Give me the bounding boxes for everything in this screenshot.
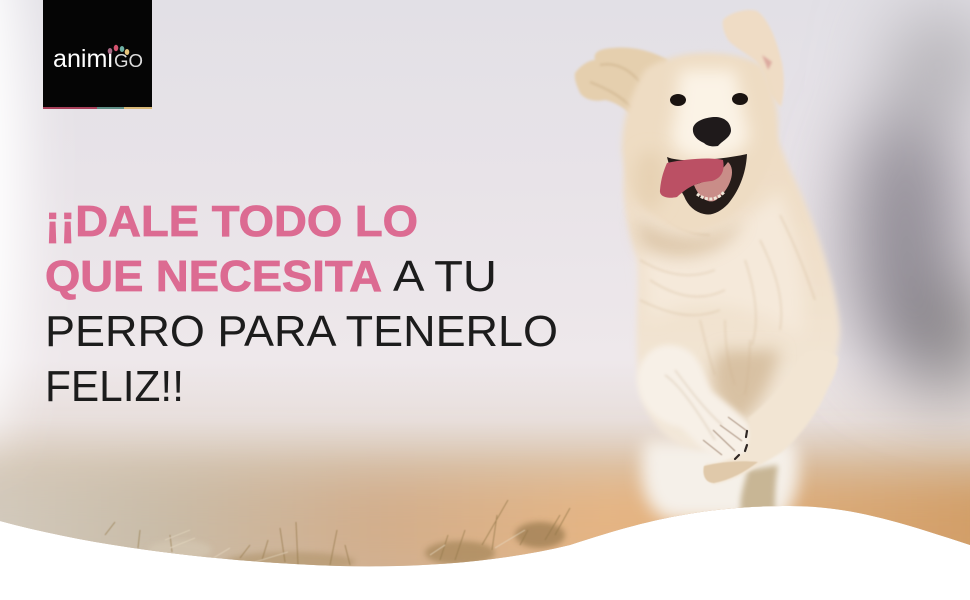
eyes	[670, 93, 748, 106]
dog fur strands	[640, 216, 815, 366]
headline: A TU	[393, 252, 497, 301]
dog	[575, 10, 840, 520]
mouth	[667, 154, 747, 215]
headline: PERRO PARA TENERLO	[45, 307, 558, 356]
nose	[693, 117, 731, 146]
dog front legs	[637, 345, 838, 484]
dog body	[624, 120, 840, 520]
dog head	[622, 53, 778, 232]
logo wordmark: GO	[114, 51, 143, 71]
headline: QUE NECESITA	[45, 252, 382, 301]
logo paw	[108, 45, 129, 55]
tongue	[660, 159, 724, 198]
headline: ¡¡DALE TODO LO	[45, 197, 418, 246]
logo wordmark: animi	[53, 45, 113, 73]
headline: FELIZ!!	[45, 362, 184, 411]
dog ears	[575, 10, 784, 120]
logo wordmark	[53, 45, 143, 73]
headline	[45, 197, 558, 411]
grass	[105, 500, 570, 572]
dog hind legs gap	[740, 465, 778, 515]
logo	[43, 0, 152, 109]
